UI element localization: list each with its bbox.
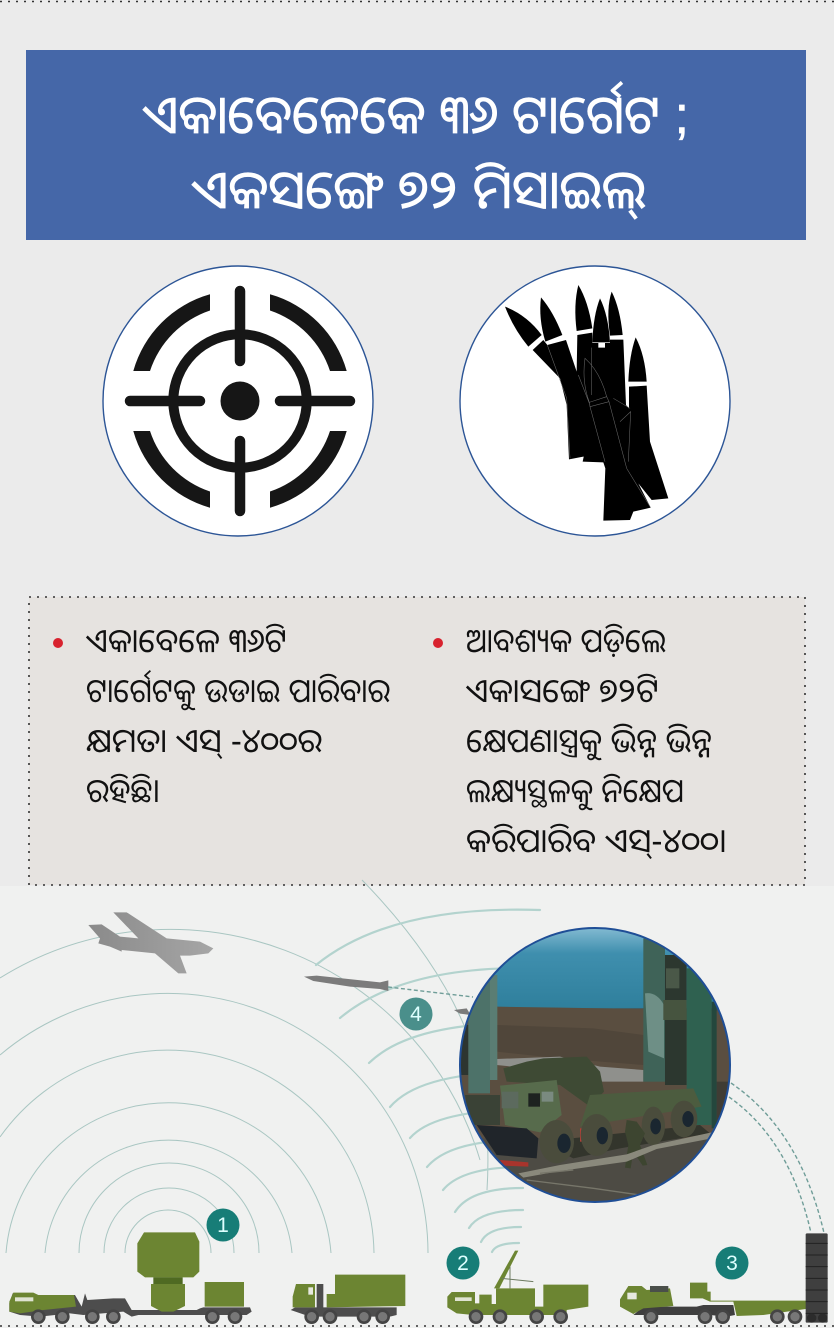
vehicle: radar truck: [9, 1232, 252, 1323]
icon: crosshair target: [103, 266, 373, 536]
badge 4: [400, 998, 432, 1030]
text block: right point: ଏକାସଙ୍ଗେ ୭୨ଟି: [465, 672, 659, 709]
text block: right point: [465, 622, 727, 859]
badge 2: [446, 1246, 480, 1280]
vehicle: antenna truck: [447, 1251, 588, 1323]
truck: [503, 1057, 604, 1107]
badge 4: 4: [410, 1003, 422, 1026]
icon: missiles: [460, 266, 730, 536]
badge 3: 3: [726, 1252, 738, 1275]
missile tubes: [460, 1025, 468, 1075]
text block: right point: ଲକ୍ଷ୍ୟସ୍ଥଳକୁ ନିକ୍ଷେପ: [466, 772, 684, 811]
badge 3: [716, 1246, 748, 1280]
vehicle: launcher truck: [620, 1233, 828, 1323]
pavement: [518, 1132, 712, 1178]
text block: left point: [85, 622, 390, 809]
soldier: [625, 1120, 647, 1168]
text block: left point: କ୍ଷମତା ଏସ୍ -୪୦୦ର: [86, 722, 322, 759]
dashed flight paths: [388, 987, 824, 1233]
badge 1: 1: [217, 1214, 229, 1237]
icon: aircraft: [88, 912, 213, 973]
vehicle: command truck: [291, 1275, 405, 1323]
text block: right point: କ୍ଷେପଣାସ୍ତ୍ରକୁ ଭିନ୍ନ ଭିନ୍ନ: [466, 722, 712, 761]
title line 2: ଏକସଙ୍ଗେ ୭୨ ମିସାଇଲ୍: [191, 161, 646, 220]
radar rings: [0, 880, 488, 1253]
panel: key points: [29, 597, 805, 885]
title banner: [26, 50, 806, 240]
photo: S-400 launcher: [457, 923, 737, 1207]
text block: right point: ଆବଶ୍ୟକ ପଡ଼ିଲେ: [466, 622, 666, 659]
badge 2: 2: [457, 1252, 469, 1275]
radio wave arcs: [316, 910, 540, 1252]
title line 1: ଏକାବେଳେକେ ୩୬ ଟାର୍ଗେଟ ;: [142, 81, 689, 145]
text block: right point: କରିପାରିବ ଏସ୍-୪୦୦।: [466, 822, 727, 859]
icon: cruise missile: [304, 976, 471, 1015]
badge 1: [206, 1208, 240, 1242]
text block: left point: ରହିଛି।: [86, 772, 160, 809]
bullet: left: [53, 638, 63, 648]
text block: left point: ଏକାବେଳେ ୩୬ଟି: [85, 622, 287, 659]
text block: left point: ଟାର୍ଗେଟକୁ ଉଡାଇ ପାରିବାର: [86, 669, 390, 711]
bullet: right: [433, 638, 443, 648]
wheels: [539, 1101, 697, 1163]
